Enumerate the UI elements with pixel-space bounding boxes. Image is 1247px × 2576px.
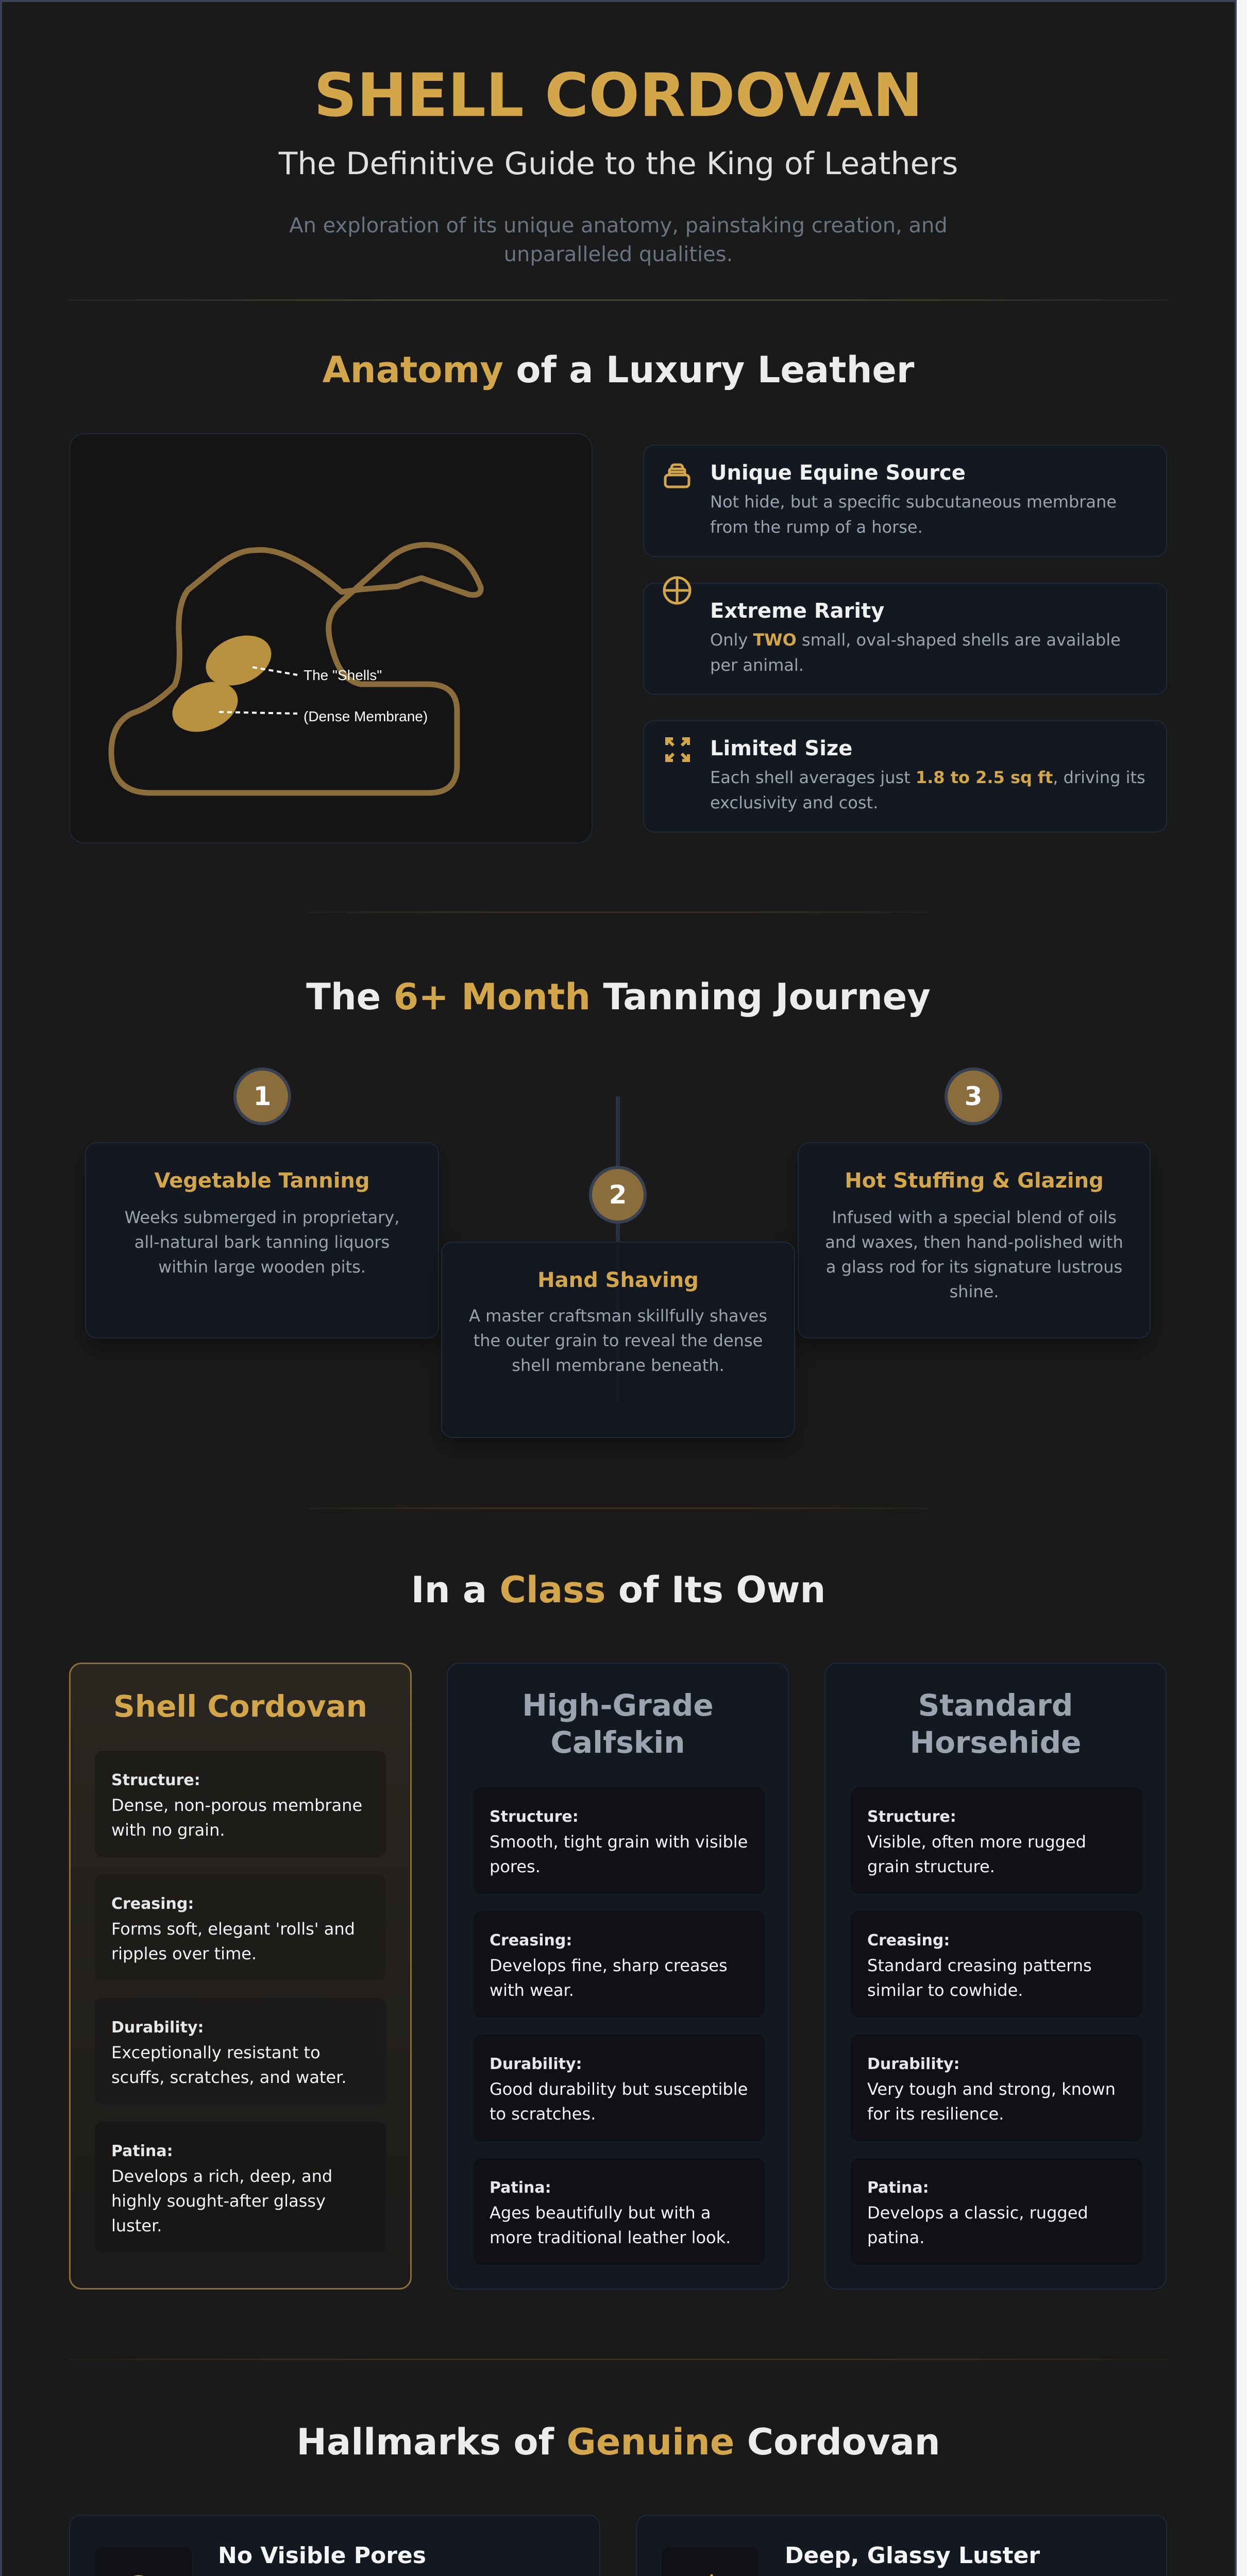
row: structure (473, 1787, 765, 1894)
row: durability: Durability: (867, 2055, 960, 2073)
row: structure: Smooth, tight grain with visible pores. (490, 1832, 748, 1876)
timeline line (616, 1096, 620, 1401)
heading: comparison: In a Class of Its Own (411, 1569, 825, 1611)
diagram: horse outline with shells: The "Shells" (304, 667, 382, 683)
step number 3 (945, 1067, 1002, 1125)
row: creasing: Forms soft, elegant 'rolls' and ripples over time. (111, 1919, 355, 1963)
heading: anatomy: Anatomy of a Luxury Leather (323, 349, 914, 391)
row: durability (95, 1998, 386, 2105)
row: structure: Structure: (111, 1771, 200, 1789)
card title: Unique Equine Source (710, 461, 966, 485)
hallmark: glassy luster (636, 2515, 1167, 2576)
diagram: horse outline with shells: (Dense Membrane) (304, 708, 428, 724)
intro text: An exploration of its unique anatomy, painstaking creation, and unparalleled qualities. (289, 214, 948, 266)
row: durability: Durability: (490, 2055, 582, 2073)
subtitle: The Definitive Guide to the King of Leathers (279, 146, 958, 182)
column title: Shell Cordovan (113, 1689, 367, 1724)
row: structure: Structure: (490, 1808, 579, 1826)
column: shell cordovan (69, 1663, 412, 2290)
heading: tanning journey: The 6+ Month Tanning Journey (306, 976, 931, 1018)
step number 2: 2 (609, 1180, 627, 1210)
diagram: horse outline with shells (108, 542, 484, 795)
row: durability: Good durability but susceptible to scratches. (490, 2079, 748, 2124)
card text: Only TWO small, oval-shaped shells are available per animal. (710, 630, 1121, 675)
step title: Hot Stuffing & Glazing (845, 1169, 1104, 1193)
row: creasing: Creasing: (490, 1931, 572, 1950)
column title (522, 1688, 714, 1760)
row: creasing: Standard creasing patterns similar to cowhide. (867, 1956, 1092, 2000)
row: structure (851, 1787, 1142, 1894)
step text: A master craftsman skillfully shaves the outer grain to reveal the dense shell membrane beneath. (469, 1306, 767, 1375)
row: durability: Very tough and strong, known for its resilience. (867, 2079, 1116, 2124)
card text: Not hide, but a specific subcutaneous membrane from the rump of a horse. (710, 492, 1117, 537)
step number 1: 1 (254, 1081, 271, 1111)
row: structure: Dense, non-porous membrane with no grain. (111, 1795, 362, 1840)
row: durability: Durability: (111, 2019, 204, 2037)
card title: Limited Size (710, 737, 852, 760)
row: patina (95, 2122, 386, 2253)
row: patina: Patina: (111, 2142, 173, 2160)
title: No Visible Pores (218, 2543, 426, 2569)
step text: Infused with a special blend of oils and waxes, then hand-polished with a glass rod for its signature lustrous shine. (825, 1208, 1123, 1301)
row: structure: Visible, often more rugged grain structure. (867, 1832, 1086, 1876)
icon: magnifier (95, 2547, 192, 2576)
row: creasing: Creasing: (111, 1895, 194, 1913)
row: durability: Exceptionally resistant to scuffs, scratches, and water. (111, 2043, 347, 2087)
row: patina: Ages beautifully but with a more traditional leather look. (490, 2203, 731, 2247)
step 2 card (441, 1242, 795, 1438)
hallmark: no visible pores (69, 2515, 600, 2576)
step number 1 (233, 1067, 291, 1125)
row: creasing: Develops fine, sharp creases with wear. (490, 1956, 728, 2000)
card: unique equine source (643, 445, 1167, 557)
row: patina: Develops a rich, deep, and highly sought-after glassy luster. (111, 2166, 332, 2235)
heading: hallmarks: Hallmarks of Genuine Cordovan (296, 2421, 940, 2463)
title: Deep, Glassy Luster (785, 2543, 1040, 2569)
row: structure (95, 1751, 386, 1857)
row: patina (851, 2158, 1142, 2265)
card text: Each shell averages just 1.8 to 2.5 sq ft, driving its exclusivity and cost. (710, 768, 1145, 812)
column title: High-Grade (522, 1688, 714, 1723)
card title: Extreme Rarity (710, 599, 884, 623)
row: durability (851, 2035, 1142, 2141)
row: patina: Patina: (490, 2179, 551, 2197)
row: patina: Patina: (867, 2179, 929, 2197)
step number 3: 3 (965, 1081, 982, 1111)
step 1 card (85, 1142, 439, 1338)
column title: Standard (918, 1688, 1073, 1723)
step text: Weeks submerged in proprietary, all-natural bark tanning liquors within large wooden pits. (125, 1208, 399, 1277)
row: durability (473, 2035, 765, 2141)
row: creasing (95, 1874, 386, 1981)
column title: Horsehide (910, 1725, 1081, 1760)
step title: Vegetable Tanning (154, 1169, 370, 1193)
row: structure: Structure: (867, 1808, 956, 1826)
step 3 card (798, 1142, 1151, 1338)
row: creasing (473, 1911, 765, 2018)
step number 2 (589, 1166, 647, 1224)
row: patina (473, 2158, 765, 2265)
row: patina: Develops a classic, rugged patina. (867, 2203, 1088, 2247)
icon: circle cross (663, 576, 692, 605)
step title: Hand Shaving (537, 1268, 699, 1292)
column title (910, 1688, 1081, 1760)
icon: box (664, 464, 690, 488)
card: limited size (643, 720, 1167, 833)
column: calfskin (447, 1663, 789, 2290)
title: SHELL CORDOVAN (314, 61, 923, 130)
row: creasing: Creasing: (867, 1931, 950, 1950)
icon: sparkle (662, 2547, 759, 2576)
icon: expand arrows (665, 737, 690, 762)
card: extreme rarity (643, 583, 1167, 695)
column title: Calfskin (550, 1725, 685, 1760)
column: horsehide (824, 1663, 1167, 2290)
row: creasing (851, 1911, 1142, 2018)
panel: anatomy diagram (69, 433, 593, 843)
